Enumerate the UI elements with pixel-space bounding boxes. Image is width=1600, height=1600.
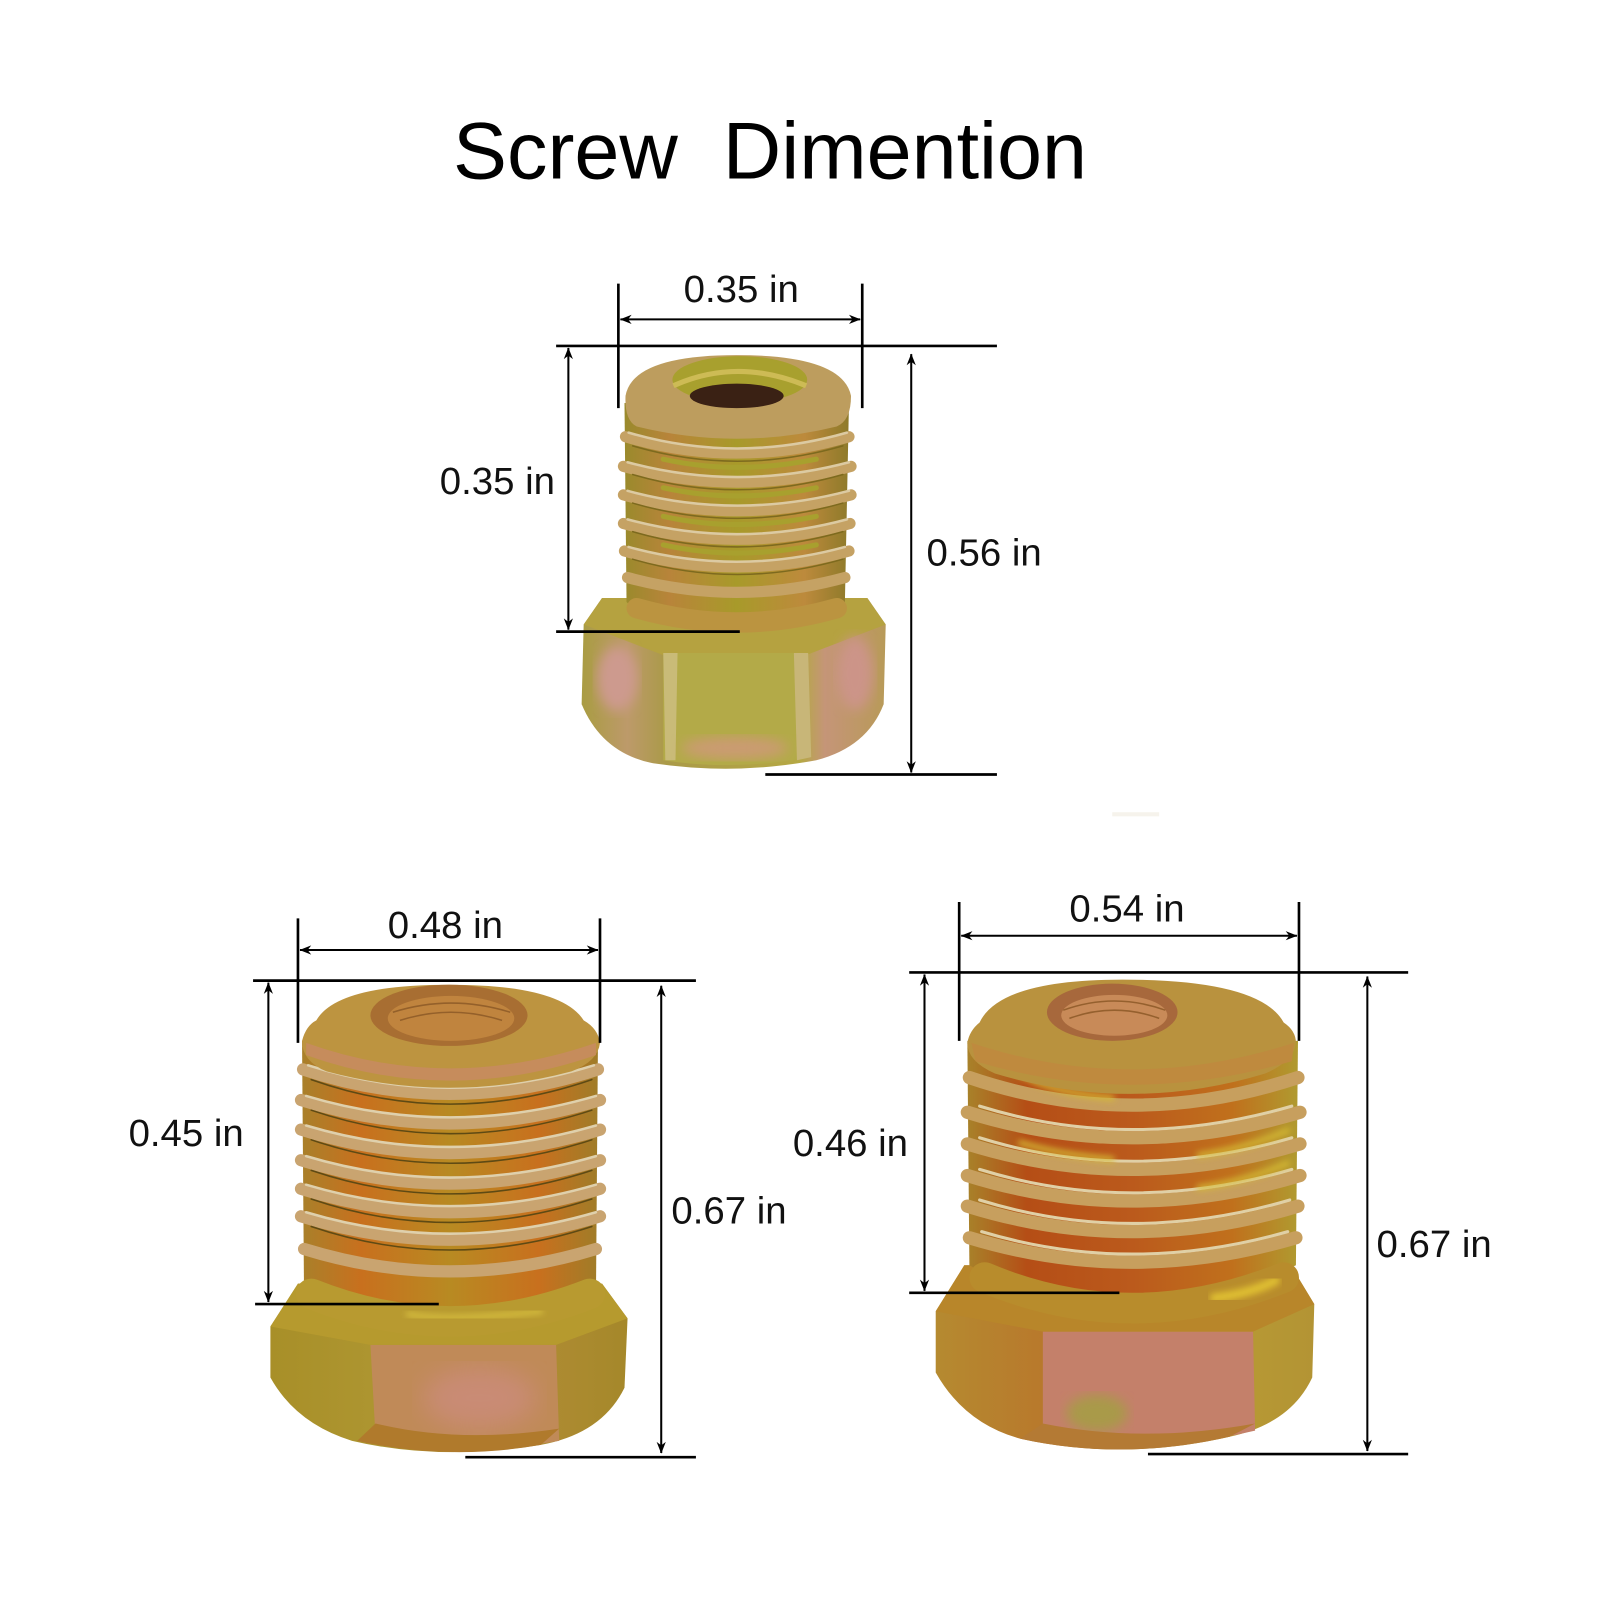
top cap with hole: [302, 985, 600, 1088]
title: Screw Dimention: [453, 107, 1087, 197]
top cap with hole: [625, 355, 851, 439]
label: 0.67 in total: 0.67 in: [1377, 1223, 1492, 1266]
label: 0.67 in total: 0.67 in: [671, 1189, 787, 1232]
screw: small top: [582, 355, 886, 769]
top cap with hole: [967, 980, 1296, 1094]
label: 0.54 in width: 0.54 in: [1069, 887, 1185, 930]
dimensions: large right: [909, 902, 1408, 1454]
dimensions: small top: [556, 284, 997, 774]
hex head: [270, 1284, 628, 1452]
hex head: [582, 598, 886, 769]
label: 0.46 in thread: 0.46 in: [793, 1122, 908, 1165]
screw: medium left: [270, 985, 628, 1452]
label: 0.35 in width: 0.35 in: [684, 268, 799, 311]
label: 0.45 in thread: 0.45 in: [129, 1112, 244, 1155]
label: 0.56 in total: 0.56 in: [927, 531, 1042, 574]
threads: [967, 1041, 1300, 1308]
label: 0.35 in thread: 0.35 in: [440, 460, 555, 503]
screw: large right: [936, 980, 1314, 1450]
threads: [301, 1041, 600, 1327]
threads: [623, 403, 851, 631]
label: 0.48 in width: 0.48 in: [388, 904, 503, 947]
hex head: [936, 1265, 1314, 1450]
dimensions: medium left: [253, 918, 696, 1457]
